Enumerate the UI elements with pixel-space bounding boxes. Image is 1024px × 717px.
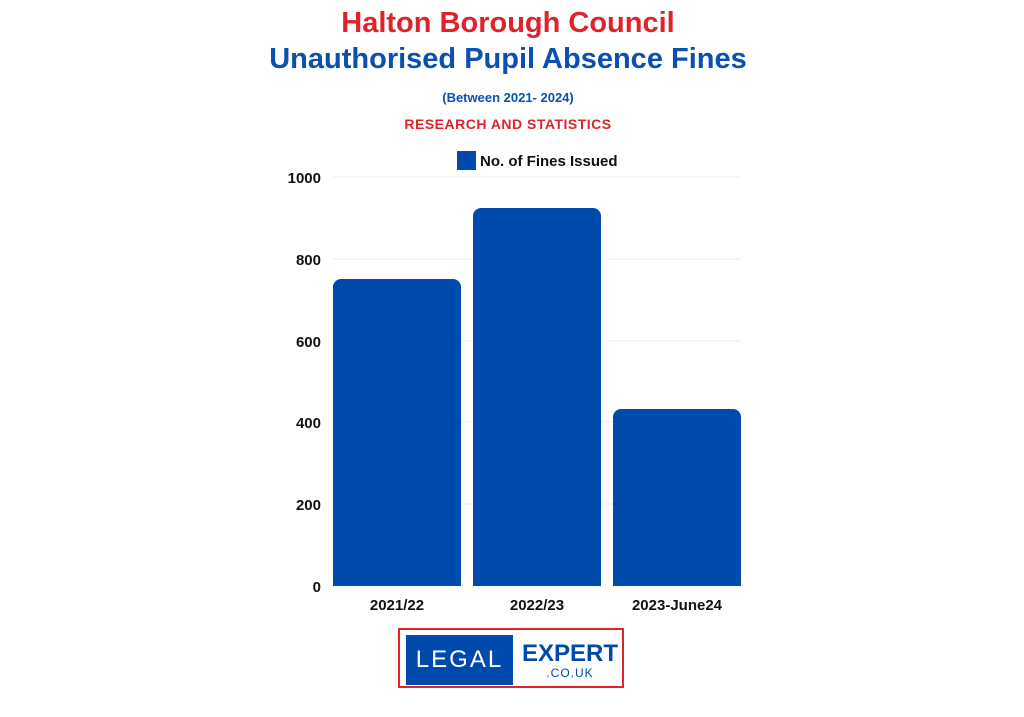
y axis labels: 800: [296, 252, 321, 269]
y axis labels: 400: [296, 415, 321, 432]
x axis labels: 2021/22: [370, 597, 424, 614]
title: [269, 7, 747, 75]
x axis labels: 2022/23: [510, 597, 564, 614]
logo: LEGAL box: [406, 635, 513, 685]
tagline: RESEARCH AND STATISTICS: [404, 116, 612, 132]
x axis labels: [370, 597, 723, 614]
legend: No. of Fines Issued: [480, 153, 618, 170]
y axis labels: 0: [313, 579, 321, 596]
logo: LEGAL box: LEGAL: [416, 646, 503, 673]
y axis labels: 600: [296, 334, 321, 351]
y axis labels: [288, 170, 321, 596]
title: Halton Borough Council: [341, 7, 675, 39]
logo: [398, 628, 624, 688]
logo: EXPERT text: EXPERT: [522, 640, 618, 667]
logo: EXPERT text: .CO.UK: [546, 666, 594, 680]
y axis labels: 200: [296, 497, 321, 514]
logo: EXPERT text: [522, 640, 618, 680]
y axis labels: 1000: [288, 170, 321, 187]
bars: [333, 208, 741, 586]
x axis labels: 2023-June24: [632, 597, 723, 614]
title: Unauthorised Pupil Absence Fines: [269, 43, 747, 75]
subtitle: (Between 2021- 2024): [442, 90, 574, 105]
